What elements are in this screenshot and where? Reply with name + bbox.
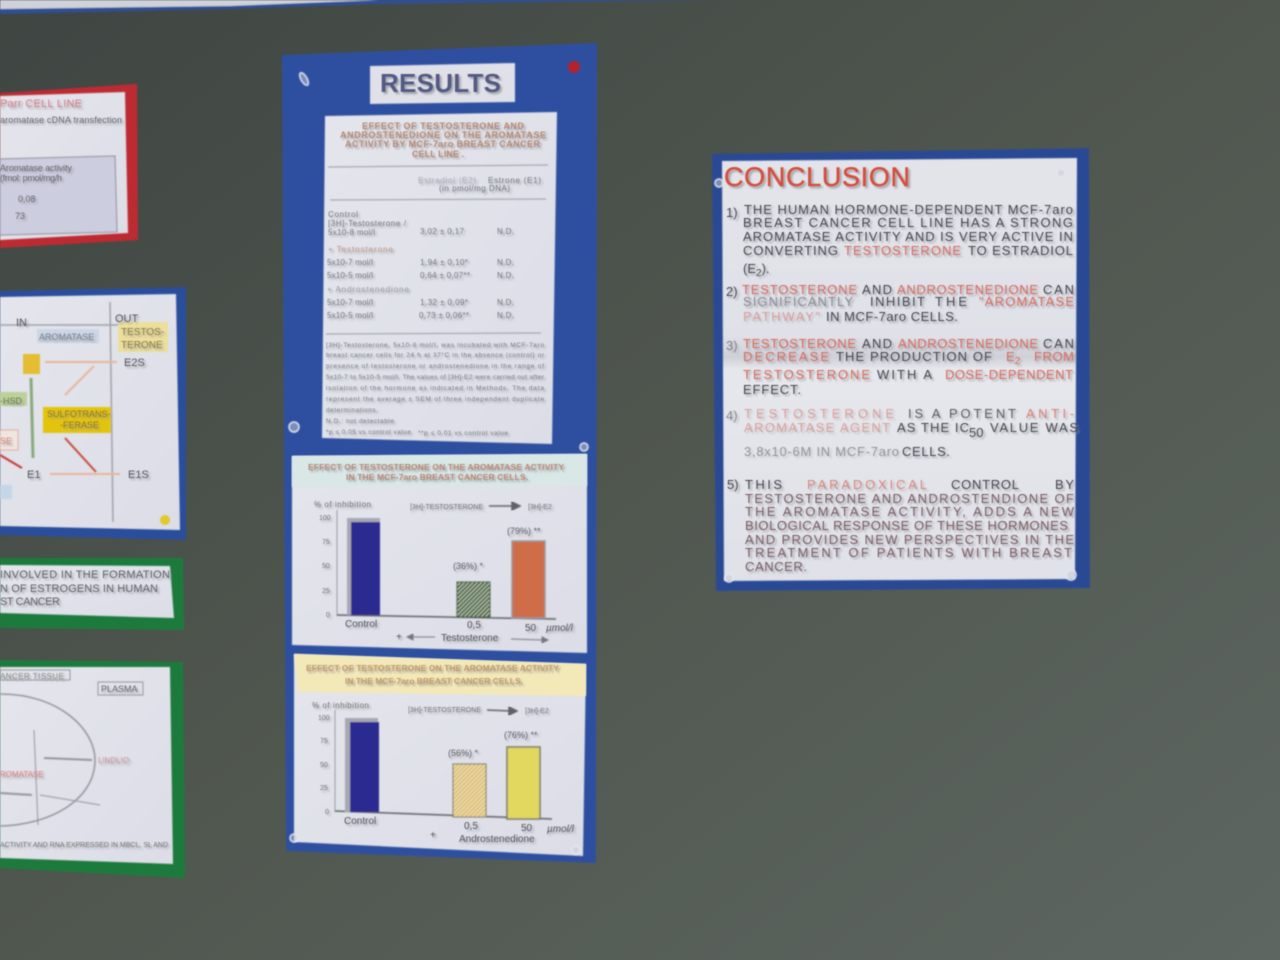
bar chart: testosterone: Testosterone	[441, 633, 499, 644]
text block: point 3: ANDROSTENEDIONE	[898, 336, 1038, 351]
panel: cell line poster, red border: Aromatase activity	[0, 163, 72, 173]
table title	[340, 121, 546, 159]
panel: pathway diagram poster, blue border: E2S	[124, 357, 145, 369]
bar chart: testosterone: 25	[322, 588, 330, 595]
text block: point 3: TESTOSTERONE	[743, 336, 856, 351]
table data: 1,94 ± 0,10*	[420, 258, 468, 267]
bar chart: testosterone: 75	[322, 539, 330, 546]
panel: green heading strip poster: N OF ESTROGENS IN HUMAN	[0, 583, 158, 595]
panel: cell line poster, red border	[0, 84, 138, 248]
bar chart: testosterone: 0	[326, 612, 330, 619]
arrows: dose direction	[407, 634, 548, 643]
table data: N.D.	[497, 298, 514, 307]
table data: 5x10-5 mol/l	[327, 311, 373, 320]
text block: point 5: CANCER.	[745, 559, 807, 574]
table data	[327, 176, 541, 320]
icons: conclusion paper clips	[715, 169, 1076, 582]
bar chart: testosterone: % of inhibition	[314, 500, 371, 509]
panel: cell line poster, red border: Parr CELL LINE	[0, 98, 82, 110]
icons: paper clips	[289, 71, 588, 854]
table data: Control	[328, 210, 358, 219]
text block: point 3: E	[1006, 349, 1015, 364]
bar chart: testosterone: [3H]-E2	[528, 504, 552, 511]
text block: point 3: AND	[862, 336, 892, 351]
table footnote: 5x10-7 to 5x10-5 mol/l. The values of [3H]-E2 were carried out after	[326, 374, 545, 381]
poster edge at top of frame	[0, 0, 730, 14]
text block: point 1: 1)	[726, 205, 738, 220]
text block: point 4: AS THE IC	[897, 420, 969, 435]
chart panel: androstenedione inhibition	[294, 654, 586, 856]
bar chart: androstenedione: % of inhibition	[312, 701, 369, 710]
text block: point 2: TESTOSTERONE	[742, 282, 857, 297]
text block: point 1	[726, 202, 1073, 279]
panel: tissue diagram poster, green border: ACTIVITY AND RNA EXPRESSED IN MBCL, SL AND	[0, 842, 168, 849]
table data: 1,32 ± 0,09*	[420, 298, 468, 307]
text block: point 4: 4)	[726, 408, 738, 423]
text block: point 1: ).	[762, 261, 770, 276]
panel: cell line poster, red border: 0,08	[18, 194, 36, 204]
text block: point 2: 2)	[726, 284, 738, 299]
bar chart: androstenedione: [3H]-E2	[525, 708, 549, 715]
table data: Estradiol (E2)	[418, 176, 476, 185]
bar chart: androstenedione: 0,5	[464, 821, 478, 832]
panel: pathway diagram poster, blue border: -HSD	[0, 396, 22, 406]
chart title: IN THE MCF-7aro BREAST CANCER CELLS.	[345, 676, 523, 686]
panel: pathway diagram poster, blue border: SULFOTRANS-	[47, 409, 111, 419]
text block: point 2: ANDROSTENEDIONE	[897, 282, 1038, 297]
bar chart: testosterone: (36%) *	[453, 561, 484, 571]
table footnote: presence of testosterone or androstenedione in the range of	[326, 363, 544, 370]
bar chart: testosterone: 50	[322, 563, 330, 570]
text block: point 1: TO ESTRADIOL	[968, 243, 1073, 258]
arrow: testosterone to E2	[487, 707, 517, 715]
bar chart: androstenedione: Control	[344, 816, 376, 827]
panel: pathway diagram poster, blue border: E1S	[128, 469, 149, 481]
text block: point 3: 2	[1015, 356, 1021, 367]
bar chart: testosterone: 50	[525, 623, 537, 634]
panel: cell line poster, red border: aromatase cDNA transfection	[0, 115, 122, 125]
bar chart: androstenedione: 50	[320, 762, 328, 769]
bar chart: androstenedione: (76%) **	[504, 730, 538, 740]
text block: point 1: THE HUMAN HORMONE-DEPENDENT MCF-7aro	[744, 202, 1073, 217]
text block: point 3: TESTOSTERONE	[743, 367, 870, 382]
panel: pathway diagram poster, blue border: -FERASE	[60, 420, 99, 430]
bar chart: androstenedione: 100	[318, 715, 330, 722]
bar chart: androstenedione	[312, 701, 575, 845]
table title: ACTIVITY BY MCF-7aro BREAST CANCER	[345, 139, 540, 149]
text block: point 2: IN MCF-7aro CELLS.	[826, 309, 958, 324]
text block: point 4: 3,8x10-6M IN MCF-7aro	[744, 444, 899, 459]
bar chart: androstenedione: Androstenedione	[459, 834, 535, 845]
text block: point 3: THE PRODUCTION OF	[836, 349, 992, 364]
table title: EFFECT OF TESTOSTERONE AND	[362, 121, 524, 131]
panel: cell line poster, red border: (fmol: pmol/mg/h	[0, 173, 62, 183]
panel: green heading strip poster: INVOLVED IN THE FORMATION	[0, 569, 170, 581]
table footnote: **p ≤ 0.01 vs control value	[418, 430, 508, 437]
table data: 5x10-7 mol/l	[327, 258, 373, 267]
table data: + Androstenedione	[327, 285, 410, 294]
text block: point 4: IS A POTENT	[908, 406, 1016, 421]
heading: conclusion: CONCLUSION	[724, 162, 910, 192]
text block: point 3	[726, 336, 1074, 397]
bar chart: testosterone: +	[396, 632, 402, 643]
bar chart: testosterone: Control	[345, 619, 377, 630]
text block: point 2: PATHWAY"	[743, 309, 820, 324]
bar chart: testosterone: [3H]-TESTOSTERONE	[410, 504, 483, 511]
bar chart: testosterone: 0,5	[467, 620, 481, 631]
text block: point 1: TESTOSTERONE	[844, 243, 961, 258]
chart title	[308, 462, 564, 482]
text block: point 2	[726, 282, 1074, 324]
panel: pathway diagram poster, blue border: TESTOS-	[121, 327, 164, 338]
panel: results poster	[282, 43, 597, 863]
text block: point 2: AND	[862, 282, 892, 297]
bar chart: testosterone: (79%) **	[507, 526, 541, 536]
text block: point 1: 2	[756, 268, 762, 279]
text block: point 5: THIS	[745, 477, 782, 492]
bar chart: androstenedione: µmol/l	[547, 824, 575, 835]
table data: 0,73 ± 0,06**	[419, 311, 469, 320]
bar chart: testosterone: µmol/l	[546, 623, 574, 634]
panel: pathway diagram poster, blue border: AROMATASE	[39, 332, 94, 342]
text block: point 1: AROMATASE ACTIVITY AND IS VERY ACTIVE IN	[743, 229, 1073, 244]
text block: point 5: TREATMENT OF PATIENTS WITH BREAST	[745, 545, 1072, 560]
bar chart: androstenedione: (56%) *	[448, 748, 479, 758]
text block: point 4: 50	[969, 425, 983, 440]
table data: + Testosterone	[328, 245, 394, 254]
bar chart: androstenedione: 25	[320, 785, 328, 792]
text block: point 4: VALUE WAS	[990, 420, 1078, 435]
panel: tissue diagram poster, green border: ROMATASE	[0, 770, 44, 779]
heading: results	[370, 63, 515, 104]
text block: point 5: PARADOXICAL	[807, 477, 927, 492]
text block: point 2: SIGNIFICANTLY	[743, 294, 853, 309]
bar chart: androstenedione: 0	[325, 809, 329, 816]
text block: point 3: EFFECT.	[743, 382, 801, 397]
chart title	[306, 663, 559, 686]
panel: pathway diagram poster, blue border: OUT	[115, 313, 138, 325]
table data: 5x10-7 mol/l	[327, 298, 373, 307]
table data: Estrone (E1)	[488, 176, 541, 185]
panel: tissue diagram poster, green border: PLASMA	[101, 684, 138, 694]
table data: N.D.	[497, 311, 514, 320]
bar chart: testosterone	[314, 500, 574, 644]
text block: point 5: AND PROVIDES NEW PERSPECTIVES IN THE	[745, 532, 1074, 547]
panel: pathway diagram poster, blue border	[0, 287, 186, 540]
panel: pathway diagram poster, blue border: IN	[16, 317, 27, 329]
table footnote: [3H]-Testosterone, 5x10-8 mol/l, was incubated with MCF-7aro	[326, 342, 544, 349]
bar chart: androstenedione: 50	[521, 823, 533, 834]
chart title: EFFECT OF TESTOSTERONE ON THE AROMATASE ACTIVITY	[306, 663, 559, 673]
table footnote: isolation of the hormone as indicated in Methods. The data	[326, 385, 544, 392]
text block: point 5: BIOLOGICAL RESPONSE OF THESE HORMONES	[745, 518, 1068, 533]
table footnote	[326, 342, 545, 437]
table data: N.D.	[497, 258, 514, 267]
table data: [3H]-Testosterone /	[328, 219, 407, 228]
table data: 5x10-5 mol/l	[327, 271, 373, 280]
text block: point 3: CAN	[1043, 336, 1074, 351]
text block: point 5	[727, 477, 1075, 574]
panel: tissue diagram poster, green border: LINDLIO	[98, 756, 129, 765]
text block: point 1: BREAST CANCER CELL LINE HAS A STRONG	[743, 215, 1073, 230]
icon: red pin	[568, 61, 580, 73]
text block: point 2: CAN	[1043, 282, 1074, 297]
text block: point 2: THE	[935, 294, 967, 309]
chart panel: testosterone inhibition	[292, 454, 587, 653]
table data: 0,64 ± 0,07**	[420, 271, 470, 280]
table footnote: breast cancer cells for 24 h at 37°C in the absence (control) or	[326, 351, 545, 359]
panel: tissue diagram poster, green border: ANCER TISSUE	[0, 672, 64, 681]
panel: tissue diagram poster, green border	[0, 660, 185, 878]
arrow: testosterone to E2	[489, 502, 520, 510]
table data: 5x10-8 mol/l	[328, 228, 375, 237]
table footnote: represent the average ± SEM of three independent duplicate	[326, 396, 544, 403]
text block: point 3: FROM	[1034, 349, 1074, 364]
chart title: EFFECT OF TESTOSTERONE ON THE AROMATASE ACTIVITY	[308, 462, 564, 472]
table data: 3,02 ± 0,17	[420, 227, 465, 236]
panel: pathway diagram poster, blue border: E1	[27, 469, 40, 481]
text block: point 3: DOSE-DEPENDENT	[945, 367, 1073, 382]
text block: point 5: BY	[1055, 477, 1074, 492]
table title: CELL LINE .	[412, 149, 464, 159]
text block: point 5: TESTOSTERONE AND ANDROSTENDIONE OF	[745, 491, 1074, 506]
text block: point 2: INHIBIT	[870, 294, 925, 309]
panel: conclusion poster	[712, 148, 1090, 591]
table data: (in pmol/mg DNA)	[439, 184, 510, 193]
chart title: IN THE MCF-7aro BREAST CANCER CELLS.	[346, 472, 528, 482]
panel: pathway diagram poster, blue border: SE	[0, 436, 12, 446]
table panel: aromatase activity	[322, 112, 557, 444]
text block: point 5: THE AROMATASE ACTIVITY, ADDS A NEW	[745, 504, 1075, 519]
bar chart: androstenedione: [3H]-TESTOSTERONE	[408, 707, 481, 714]
text block: point 2: "AROMATASE	[979, 294, 1074, 309]
table data: N.D.	[497, 271, 514, 280]
text block: point 4: CELLS.	[902, 444, 950, 459]
text block: point 4: ANTI-	[1026, 406, 1074, 421]
panel: pathway diagram poster, blue border: TERONE	[121, 340, 163, 351]
text block: point 4: TESTOSTERONE	[744, 406, 894, 421]
text block: point 1: CONVERTING	[743, 243, 838, 258]
table footnote: *p ≤ 0.05 vs control value	[326, 429, 411, 436]
table data: N.D.	[497, 227, 514, 236]
text block: point 3: 3)	[726, 338, 738, 353]
panel: green heading strip poster: ST CANCER	[0, 596, 60, 608]
table title: ANDROSTENEDIONE ON THE AROMATASE	[340, 130, 546, 140]
panel: green heading strip poster	[0, 558, 184, 630]
text block: point 5: CONTROL	[951, 477, 1019, 492]
text block: point 3: DECREASE	[743, 349, 829, 364]
table footnote: N.D.: not detectable	[326, 418, 394, 425]
text block: point 4	[726, 406, 1078, 459]
text block: point 1: (E	[743, 261, 756, 276]
panel: cell line poster, red border: 73	[15, 211, 25, 221]
bar chart: androstenedione: 75	[320, 738, 328, 745]
text block: point 4: AROMATASE AGENT	[744, 420, 890, 435]
bar chart: testosterone: 100	[319, 515, 331, 522]
heading: results: RESULTS	[380, 68, 501, 98]
table footnote: determinations.	[326, 407, 378, 414]
text block: point 5: 5)	[727, 477, 739, 492]
bar chart: androstenedione: +	[430, 830, 436, 841]
text block: point 3: WITH A	[877, 367, 932, 382]
